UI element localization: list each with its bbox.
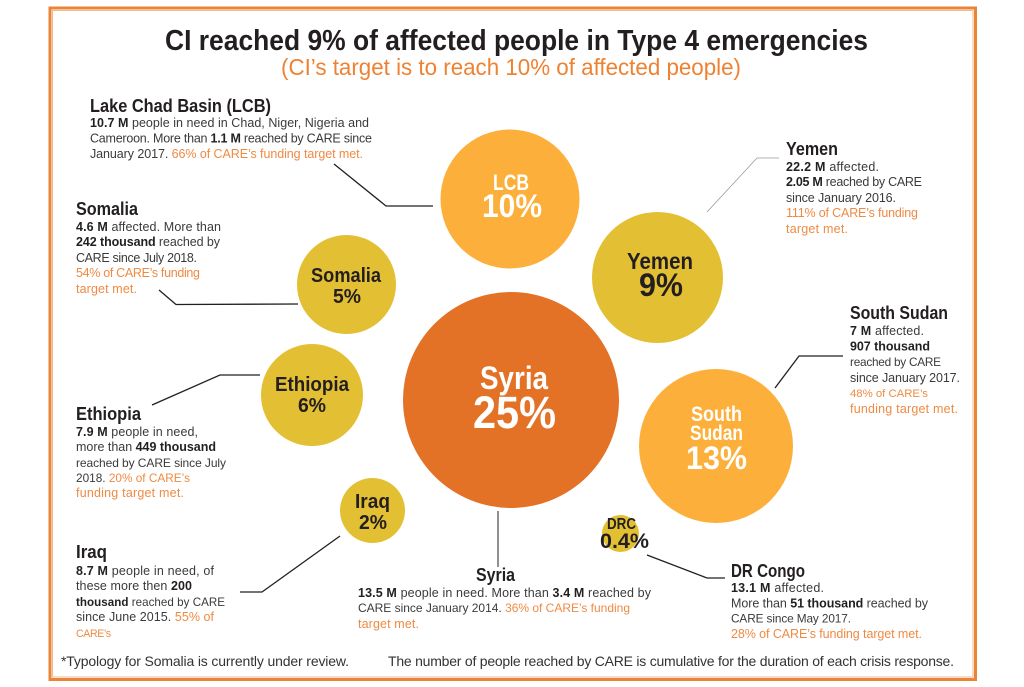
text block: Syria: CARE since January 2014. 36% of CARE’s funding xyxy=(358,601,630,615)
text block: Lake Chad Basin xyxy=(90,95,372,161)
text block: Lake Chad Basin: Lake Chad Basin (LCB) xyxy=(90,95,271,116)
text block: Ethiopia: 7.9 M people in need, xyxy=(76,425,198,439)
text block: South Sudan: since January 2017. xyxy=(850,371,960,385)
text block: Ethiopia: 2018. 20% of CARE’s xyxy=(76,471,190,485)
text block: Somalia xyxy=(76,198,221,296)
bubble: Yemen xyxy=(592,212,723,343)
text block: Somalia: Somalia xyxy=(76,198,139,219)
text block: Lake Chad Basin: January 2017. 66% of CARE’s funding target met. xyxy=(90,147,363,161)
bubble: South Sudan: 13% xyxy=(686,440,747,476)
text block: Lake Chad Basin: 10.7 M people in need in Chad, Niger, Nigeria and xyxy=(90,116,369,130)
bubble: Syria: 25% xyxy=(473,387,556,438)
text block: DR Congo: CARE since May 2017. xyxy=(731,612,851,626)
text block: DR Congo: More than 51 thousand reached by xyxy=(731,596,929,610)
text block: Syria: target met. xyxy=(358,617,419,631)
text block: Yemen: Yemen xyxy=(786,138,838,159)
text block: South Sudan: funding target met. xyxy=(850,402,958,416)
bubble: LCB xyxy=(440,130,580,268)
text block: Ethiopia: reached by CARE since July xyxy=(76,456,226,470)
text block: Ethiopia: Ethiopia xyxy=(76,403,142,424)
footnote: typology: *Typology for Somalia is currently under review. xyxy=(61,653,349,669)
bubble: South Sudan: Sudan xyxy=(690,422,743,445)
text block: Ethiopia: more than 449 thousand xyxy=(76,440,216,454)
text block: Yemen: since January 2016. xyxy=(786,191,896,205)
text block: DR Congo: 28% of CARE’s funding target met. xyxy=(731,627,922,641)
leader line: DR Congo xyxy=(647,555,725,578)
bubble: Syria xyxy=(403,292,619,508)
subtitle: (CI’s target is to reach 10% of affected people) xyxy=(281,54,741,80)
footnote: cumulative: The number of people reached by CARE is cumulative for the duration of each crisis response. xyxy=(388,653,954,669)
title: CI reached 9% of affected people in Type 4 emergencies xyxy=(165,25,868,57)
bubble: DRC: 0.4% xyxy=(600,530,649,553)
bubble: LCB: LCB xyxy=(493,170,529,195)
text block: Iraq: 8.7 M people in need, of xyxy=(76,564,215,578)
bubble: Syria: Syria xyxy=(480,360,548,396)
bubble: Somalia: 5% xyxy=(333,285,361,308)
text block: Iraq: CARE’s xyxy=(76,628,111,640)
text block: Syria: 13.5 M people in need. More than 3.4 M reached by xyxy=(358,586,652,600)
bubble: LCB: 10% xyxy=(482,188,542,224)
text block: South Sudan: reached by CARE xyxy=(850,355,941,369)
leader line: Ethiopia xyxy=(152,375,260,405)
text block: South Sudan: 48% of CARE’s xyxy=(850,388,928,400)
text block: Somalia: 54% of CARE’s funding xyxy=(76,266,200,280)
leader line: LCB xyxy=(334,164,433,206)
bubble: Iraq: Iraq xyxy=(355,491,390,513)
text block: South Sudan: South Sudan xyxy=(850,302,948,323)
text block: Ethiopia xyxy=(76,403,226,500)
text block: Iraq: since June 2015. 55% of xyxy=(76,610,215,624)
text block: Syria xyxy=(358,564,652,631)
bubble: Ethiopia: 6% xyxy=(298,395,326,417)
text block: South Sudan xyxy=(850,302,960,416)
text block: Ethiopia: funding target met. xyxy=(76,486,184,500)
bubble: DRC: DRC xyxy=(607,516,636,533)
text block: Yemen xyxy=(786,138,922,236)
bubble: Ethiopia xyxy=(261,344,363,446)
text block: Iraq: these more then 200 xyxy=(76,579,192,593)
text block: Somalia: target met. xyxy=(76,282,137,296)
text block: Somalia: CARE since July 2018. xyxy=(76,251,197,265)
bubble: Somalia: Somalia xyxy=(311,264,382,287)
bubble: Somalia xyxy=(297,235,396,334)
bubble: DRC xyxy=(600,515,649,553)
text block: DR Congo xyxy=(731,560,929,641)
text block: Syria: Syria xyxy=(476,564,516,585)
bubble: Iraq: 2% xyxy=(359,512,387,534)
bubble: South Sudan: South xyxy=(691,403,742,426)
text block: South Sudan: 7 M affected. xyxy=(850,324,924,338)
text block: Iraq xyxy=(76,541,225,640)
bubble: Iraq xyxy=(340,478,405,543)
leader line: Syria xyxy=(497,511,499,567)
text block: South Sudan: 907 thousand xyxy=(850,340,930,354)
text block: Yemen: target met. xyxy=(786,222,848,236)
text block: Iraq: thousand reached by CARE xyxy=(76,596,225,609)
text block: Yemen: 22.2 M affected. xyxy=(786,160,879,174)
text block: Yemen: 2.05 M reached by CARE xyxy=(786,175,922,189)
text block: Somalia: 242 thousand reached by xyxy=(76,235,221,249)
text block: Lake Chad Basin: Cameroon. More than 1.1 M reached by CARE since xyxy=(90,132,372,146)
leader line: South Sudan xyxy=(775,356,843,388)
leader line: Somalia xyxy=(159,290,298,304)
text block: DR Congo: 13.1 M affected. xyxy=(731,581,824,595)
text block: Iraq: Iraq xyxy=(76,541,107,562)
leader line: Iraq xyxy=(240,536,340,592)
text block: DR Congo: DR Congo xyxy=(731,560,805,581)
bubble: Ethiopia: Ethiopia xyxy=(275,374,350,396)
leader line: Yemen xyxy=(707,158,779,212)
bubble: South Sudan xyxy=(639,369,793,523)
bubble: Yemen: Yemen xyxy=(627,248,693,274)
text block: Somalia: 4.6 M affected. More than xyxy=(76,220,221,234)
bubble: Yemen: 9% xyxy=(639,267,683,303)
text block: Yemen: 111% of CARE’s funding xyxy=(786,206,918,220)
